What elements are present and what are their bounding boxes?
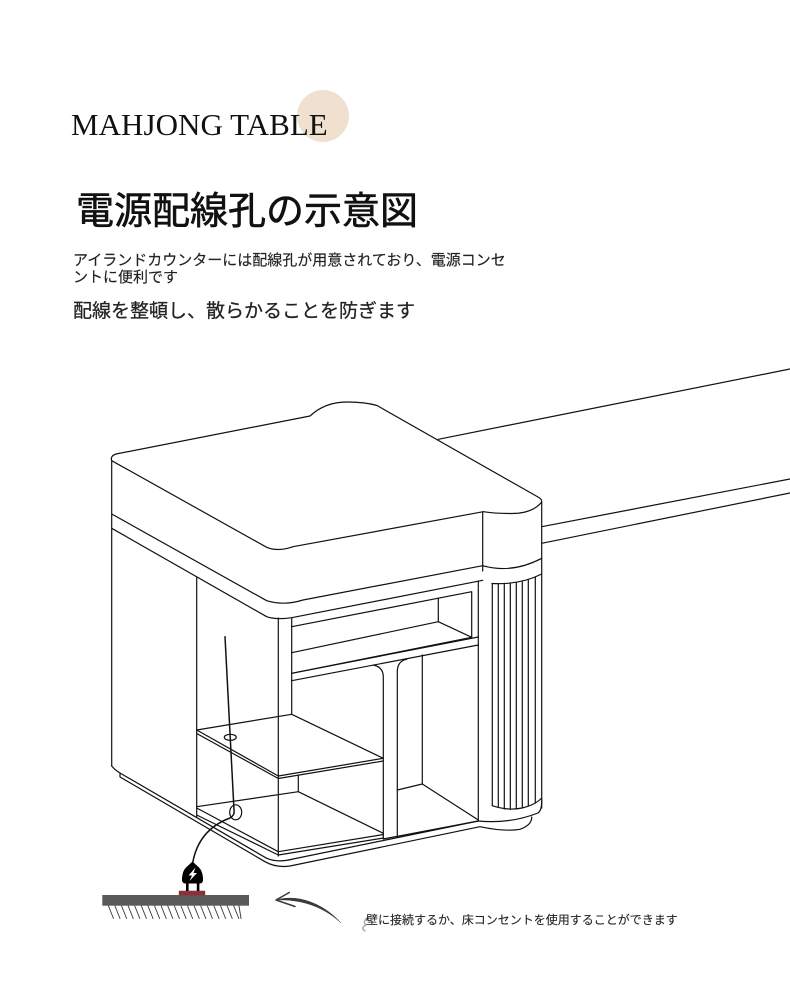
cabinet outer body <box>112 461 542 866</box>
bottom caption: 壁に接続するか、床コンセントを使用することができます <box>366 913 678 927</box>
lower shelf floor with hole <box>197 776 478 855</box>
table top surface <box>111 402 542 550</box>
long table extension <box>438 369 790 543</box>
drawer opening <box>292 592 478 681</box>
subheading text: 配線を整頓し、散らかることを防ぎます <box>73 301 415 322</box>
smudge near caption <box>363 917 368 931</box>
decorative circle behind title <box>297 90 349 142</box>
middle shelf with hole <box>197 714 383 778</box>
title: MAHJONG TABLE <box>71 107 328 142</box>
floor and plug icon <box>102 862 249 918</box>
curved arrow <box>276 892 341 923</box>
heading: 電源配線孔の示意図 <box>76 191 418 233</box>
power cable <box>192 637 234 864</box>
cabinet interior verticals <box>197 577 422 856</box>
fluted column <box>478 577 542 821</box>
description text: アイランドカウンターには配線孔が用意されており、電源コンセントに便利です <box>73 252 506 286</box>
